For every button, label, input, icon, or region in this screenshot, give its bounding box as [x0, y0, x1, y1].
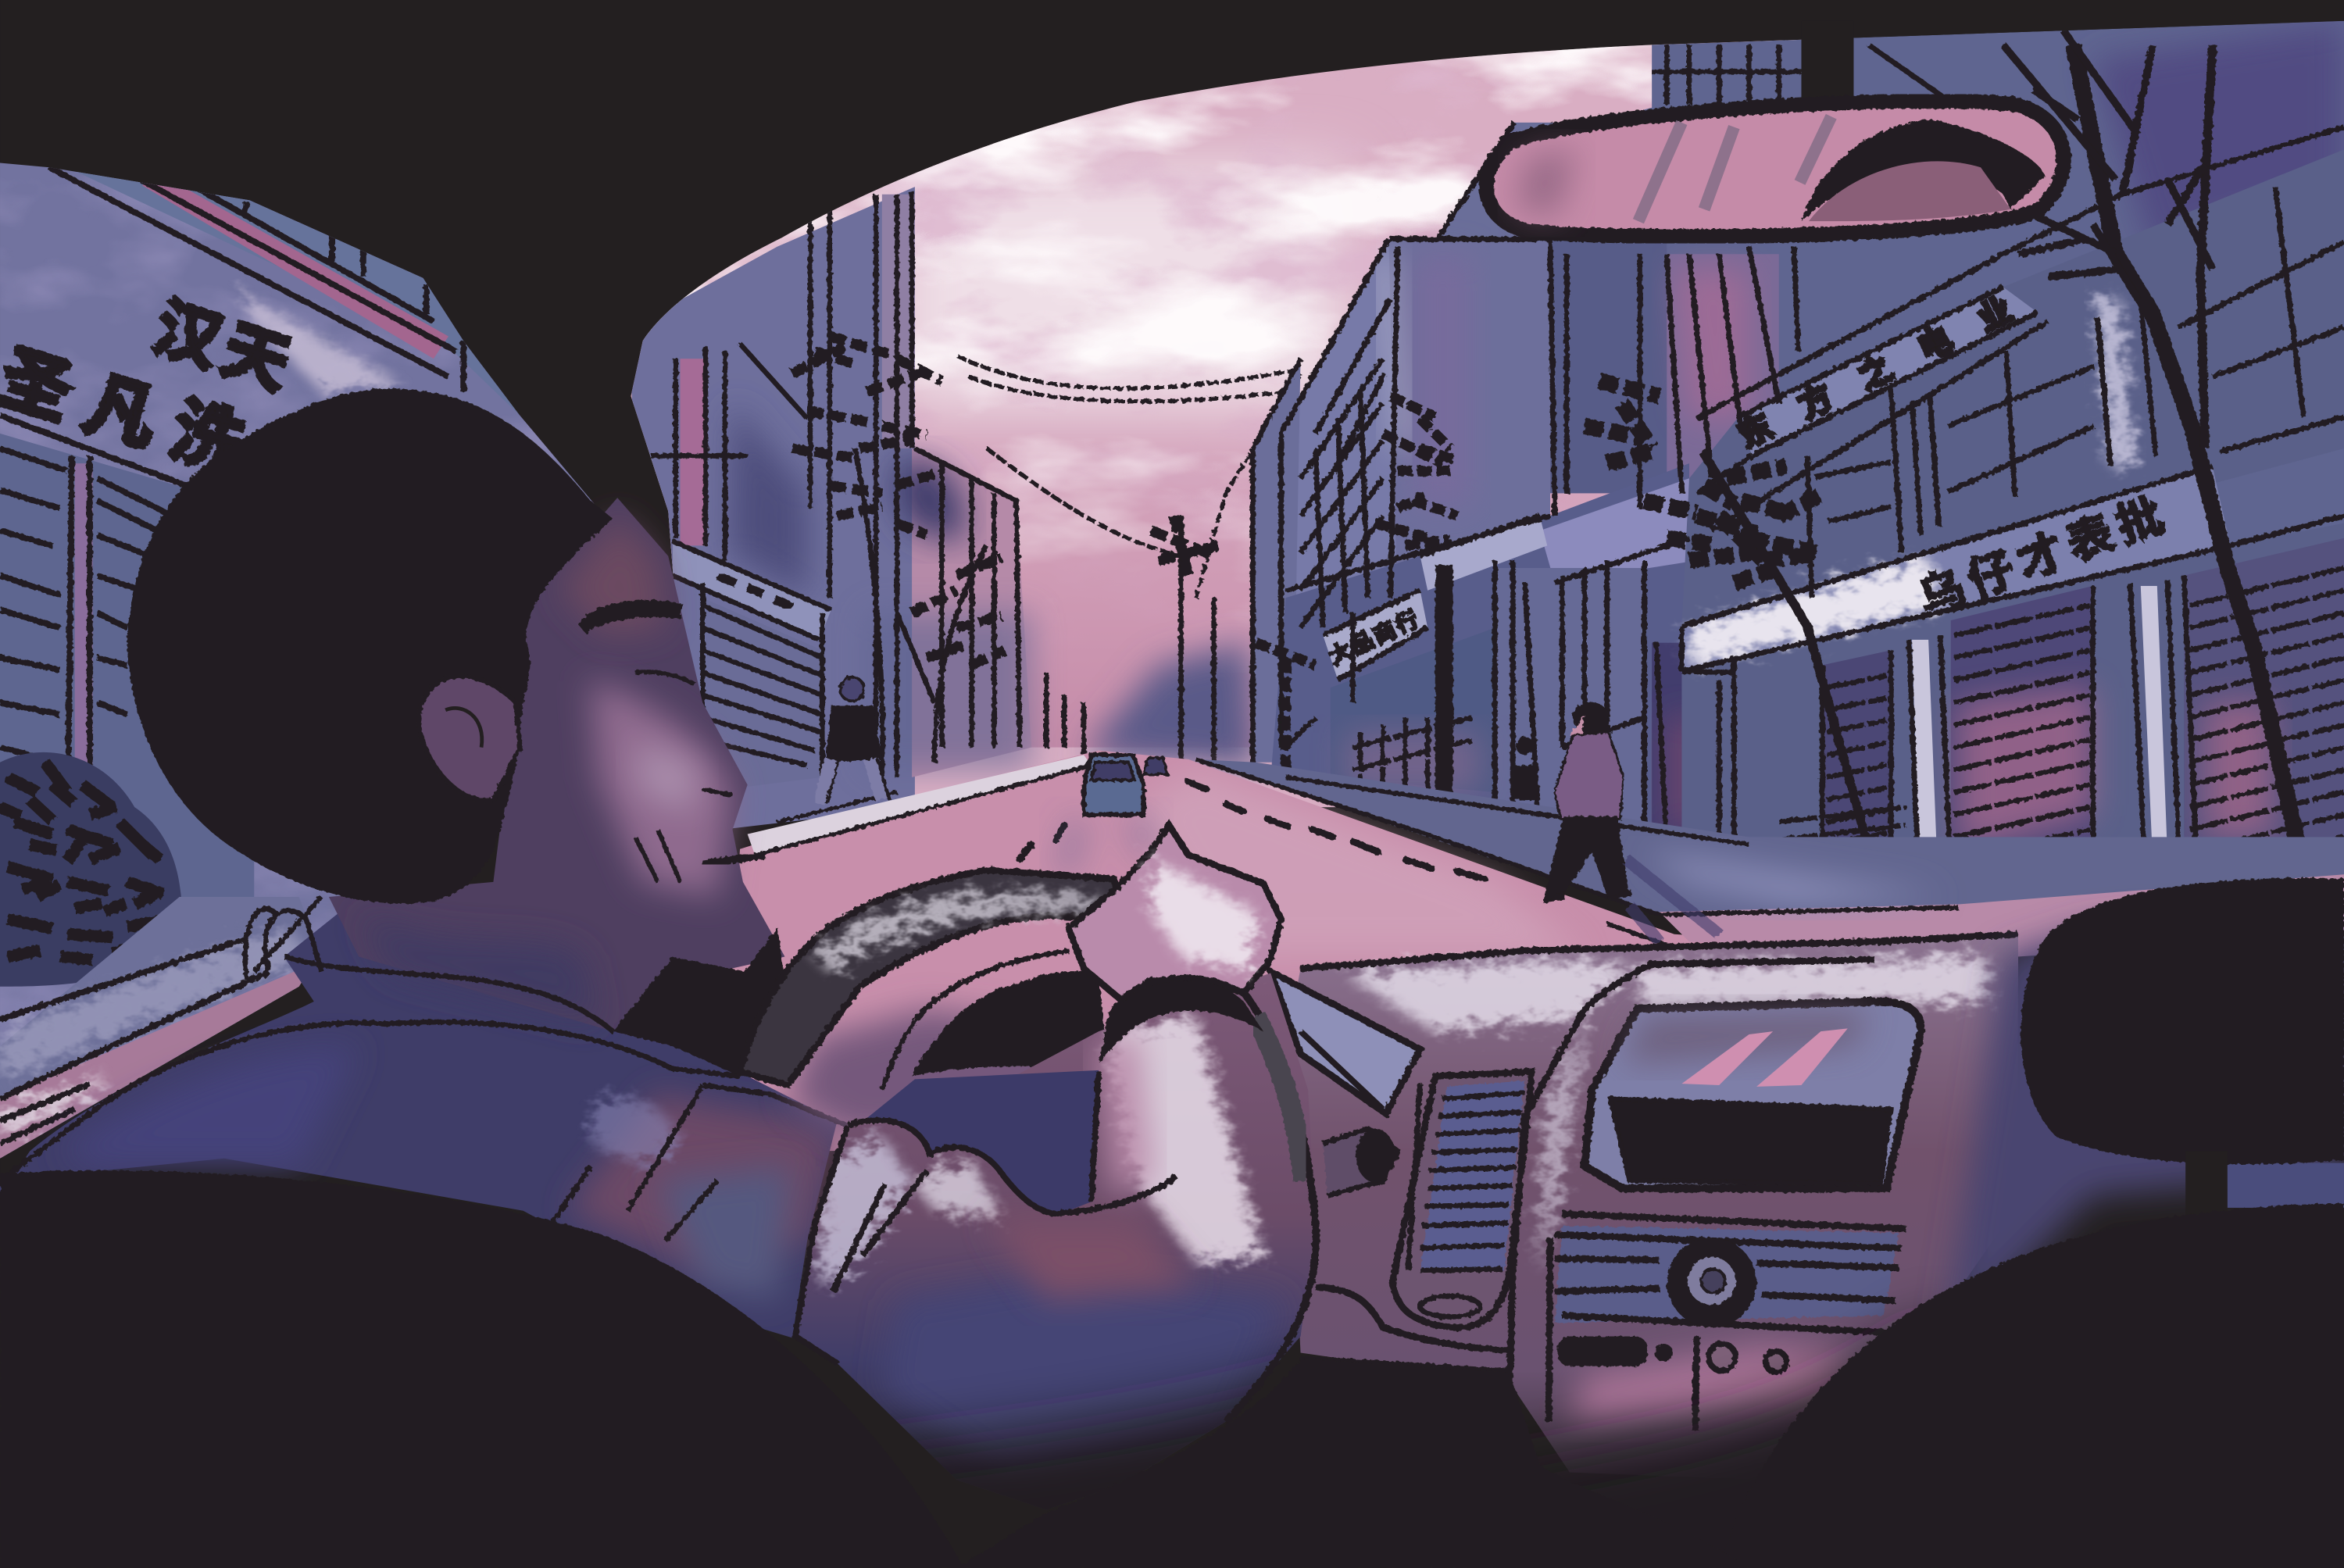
left street trees [792, 336, 1218, 777]
rim highlight [815, 892, 1099, 972]
eyebrow [578, 600, 683, 634]
dark shirt opening [613, 927, 792, 1077]
dark band behind headrest [1943, 912, 2344, 1345]
front seat right with headrest [1719, 878, 2344, 1568]
glass facade and shopfronts [1681, 149, 2344, 627]
mirror grey bars [1638, 116, 1831, 221]
driver right arm and hand [777, 825, 1345, 1568]
arm ink lines [795, 978, 1244, 1363]
sleeve fold lines [545, 1085, 848, 1241]
right street buildings [1252, 21, 2344, 897]
mirror streaks [1516, 149, 1577, 216]
windshield street scene [628, 15, 2344, 1166]
shoulder and torso [0, 897, 837, 1338]
left street buildings [628, 187, 1031, 837]
strip beside headrest post [2228, 1163, 2344, 1208]
side building awning stripes [77, 172, 520, 415]
collar and shoulder lines [0, 897, 740, 1180]
steering wheel upper rim [740, 870, 1121, 1090]
dark gauge cluster hood [912, 972, 1106, 1077]
distant dark building [1084, 643, 1256, 770]
dashboard highlights [1345, 956, 1988, 1031]
side building ink lines [0, 167, 467, 766]
roller shutter lines [1353, 568, 2344, 892]
main shop sign lettering: 乌仔才表批 [1911, 488, 2171, 625]
hand highlights [1151, 859, 1256, 972]
road surface [717, 750, 2018, 1166]
road lane markings [1020, 782, 1485, 879]
side building sign lettering [0, 294, 292, 467]
sidewalk and curb [0, 897, 321, 1098]
small sign lettering: 大品商行 [1325, 607, 1423, 670]
sleeve washes [777, 1016, 1345, 1568]
volume knob [1667, 1238, 1756, 1327]
arm sleeve shape [795, 973, 1316, 1509]
screen reflections [1681, 1028, 1848, 1087]
car reflections on road [1064, 815, 1148, 874]
pedestrian crossing right [1513, 702, 1719, 941]
pedestrian on left sidewalk [819, 677, 889, 804]
reflected driver in mirror [1801, 120, 2045, 221]
mirror frame and glass [1487, 101, 2064, 237]
cigarette [702, 855, 766, 864]
headrest post [2185, 1151, 2228, 1226]
car ahead [1084, 755, 1167, 815]
dashboard [1270, 934, 2018, 1480]
dashboard center panel tint [1570, 1345, 1853, 1420]
dashboard contour lines [1301, 934, 2018, 1377]
steering wheel interior behind rim [788, 1009, 1099, 1136]
driver seat foreground [0, 1170, 964, 1568]
hand on wheel [1069, 825, 1281, 1000]
sleeve cuff dark gap [1099, 979, 1263, 1063]
wheel inner ring lines [882, 951, 1069, 1090]
neck and face [329, 498, 784, 1031]
right sidewalk [1196, 759, 2344, 915]
headrest [2021, 878, 2344, 1164]
turn signal stalk and knob [1270, 972, 1420, 1196]
screen upper shading [1622, 1010, 1869, 1064]
side building sign lettering: 汉天 [145, 291, 298, 402]
main shop sign [1681, 466, 2231, 671]
driver [0, 388, 848, 1338]
building ink lines [1252, 45, 2344, 897]
lower cabin shadow [956, 1359, 1749, 1568]
air vent [1393, 1072, 1532, 1327]
steering wheel right rim [1226, 992, 1316, 1422]
left sidewalk [748, 755, 1092, 855]
side window with street view [0, 149, 598, 1196]
roadside shrubs [0, 752, 182, 987]
shop sign awnings [1540, 478, 1697, 583]
hair silhouette [127, 388, 613, 903]
navy panel inside wheel above cuff [859, 1070, 1099, 1213]
console fade into darkness [1420, 1316, 1974, 1568]
rim shape [740, 870, 1121, 1085]
second sign lettering: 东方之电业 [1733, 291, 2018, 455]
dashboard body [1285, 934, 2018, 1480]
radio and climate controls [1549, 1214, 1906, 1430]
black display panel [1610, 1098, 1891, 1184]
closed eye and face lines [635, 672, 733, 882]
power lines [956, 355, 1301, 598]
seat back [1719, 1203, 2344, 1568]
infotainment screen [1585, 1002, 1921, 1188]
mirror mount [1801, 21, 1853, 105]
right street trees [1256, 30, 2310, 897]
sky with clouds [628, 15, 1824, 807]
ear [419, 676, 520, 801]
rear view mirror [1487, 21, 2064, 237]
side building wall [0, 149, 598, 1196]
